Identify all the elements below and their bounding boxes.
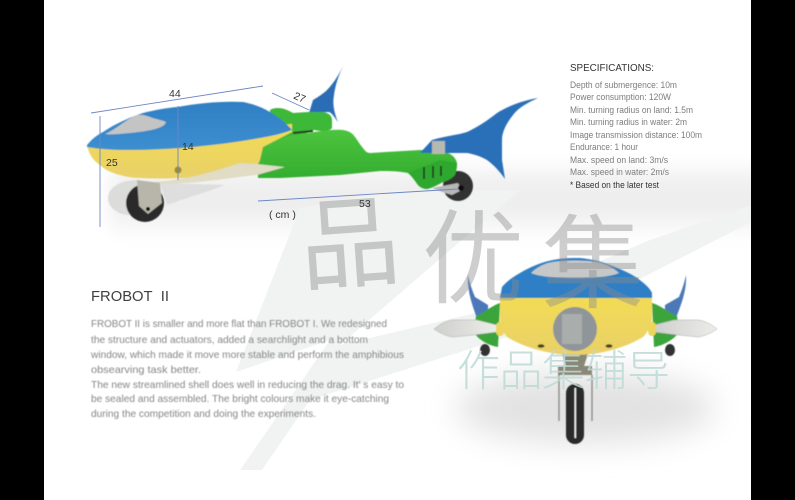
nose mount	[558, 354, 592, 375]
specifications list	[570, 80, 702, 190]
tail fin bracket	[432, 141, 445, 154]
wing shadow	[160, 183, 225, 205]
rear upper green body	[270, 108, 332, 145]
watermark characters: 品	[296, 186, 403, 305]
description paragraph: the structure and actuators, added a searchlight and a bottom	[91, 334, 368, 346]
hull vents	[538, 344, 544, 348]
description paragraph: during the competition and doing the experiments.	[91, 408, 316, 420]
specifications list: * Based on the later test	[570, 180, 659, 190]
tail vents	[424, 166, 441, 179]
cockpit window	[105, 115, 166, 134]
left side wheel	[480, 344, 490, 356]
right side wheel	[665, 344, 675, 356]
dimension labels: 25	[106, 157, 118, 169]
watermark characters	[296, 186, 644, 322]
description paragraph: obsearving task better.	[91, 364, 201, 376]
right fin	[665, 275, 686, 318]
specifications list: Endurance: 1 hour	[570, 142, 638, 152]
left wing	[434, 320, 497, 337]
specifications list: Min. turning radius on land: 1.5m	[570, 105, 693, 115]
watermark characters: 优	[422, 203, 524, 317]
blue shell	[87, 102, 292, 150]
description paragraph: FROBOT II is smaller and more flat than FROBOT I. We redesigned	[91, 318, 387, 330]
left fin	[468, 275, 488, 318]
description paragraph: be sealed and assembled. The bright colours make it eye-catching	[91, 393, 389, 405]
specifications list: Min. turning radius in water: 2m	[570, 117, 687, 127]
description paragraph: The new streamlined shell does well in reducing the drag. It' s easy to	[91, 379, 404, 391]
ventral fin disc	[108, 180, 140, 215]
front windshield	[531, 260, 619, 278]
dimension labels: 27	[292, 90, 307, 106]
side knobs	[496, 322, 504, 336]
dimension labels	[106, 88, 371, 221]
front view robot	[434, 258, 717, 444]
specifications list: Max. speed on land: 3m/s	[570, 155, 668, 165]
specifications list: Max. speed in water: 2m/s	[570, 167, 669, 177]
dimension labels: 44	[169, 88, 181, 100]
front view shadow	[455, 372, 715, 444]
background swoosh logo	[236, 229, 736, 470]
specifications list: Image transmission distance: 100m	[570, 130, 702, 140]
green tail cap over wheel	[408, 160, 457, 189]
window insert	[562, 314, 582, 344]
main tail fin	[420, 98, 538, 179]
dark joint between bodies	[293, 131, 313, 133]
right wing	[654, 320, 717, 337]
side view dimension lines	[91, 86, 458, 227]
title: FROBOT II	[91, 288, 169, 305]
rear lower wheel	[443, 171, 473, 201]
nose wheel	[566, 384, 584, 444]
tail wheel fork	[432, 183, 462, 195]
green side pods	[474, 303, 500, 347]
side view floor shadow	[110, 171, 751, 226]
teal watermark text: 作品集辅导	[457, 348, 670, 396]
ventral fin	[143, 163, 285, 184]
yellow hull front	[500, 298, 652, 355]
watermark characters: 集	[542, 208, 644, 322]
yellow hull	[87, 124, 292, 179]
side view robot	[87, 63, 538, 222]
nose wheel fork	[559, 375, 592, 421]
dimension labels: ( cm )	[269, 209, 296, 221]
specifications heading: SPECIFICATIONS:	[570, 62, 654, 74]
specifications list: Power consumption: 120W	[570, 92, 671, 102]
wheel hub	[458, 185, 464, 191]
hull side peg	[174, 166, 182, 174]
specifications list: Depth of submergence: 10m	[570, 80, 677, 90]
front wheel	[126, 180, 164, 222]
description paragraph: window, which made it move more stable and perform the amphibious	[90, 349, 404, 361]
description paragraph	[90, 318, 404, 420]
dimension labels: 14	[182, 141, 194, 153]
blue dome	[500, 258, 652, 298]
nose wheel slit	[574, 388, 576, 438]
dimension labels: 53	[359, 198, 371, 210]
rear upper fin	[309, 63, 345, 122]
green fuselage	[258, 130, 457, 189]
bottom window	[553, 307, 597, 351]
